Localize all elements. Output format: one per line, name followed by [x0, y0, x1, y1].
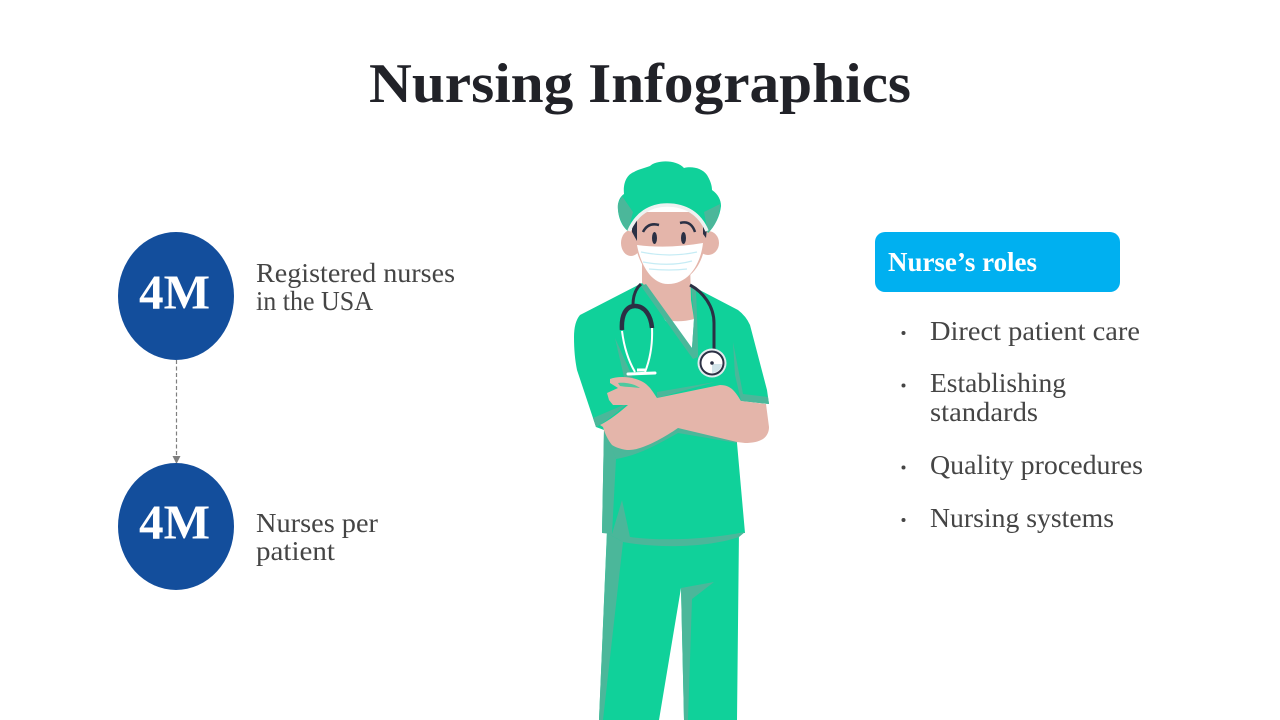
- role: quality procedures: Quality procedures: [930, 450, 1143, 480]
- text: registered nurses in the USA: Registered nurses: [256, 258, 455, 288]
- hair sides: [632, 217, 707, 241]
- illustration: nurse: [574, 161, 769, 720]
- pants: [599, 530, 739, 720]
- text: nurses per patient: [256, 508, 378, 566]
- role: establishing standards: Establishing: [930, 368, 1066, 398]
- arrow: dashed connector: [172, 360, 180, 464]
- role: nursing systems: Nursing systems: [930, 503, 1114, 533]
- title: Nursing Infographics: [369, 53, 911, 115]
- undershirt: [665, 319, 694, 348]
- eyes and brows: [643, 222, 695, 244]
- text: registered nurses in the USA: [256, 258, 455, 316]
- collar: [641, 284, 698, 359]
- role: direct patient care: Direct patient care: [930, 316, 1140, 346]
- text: nurses per patient: Nurses per: [256, 508, 378, 538]
- text: registered nurses in the USA: in the USA: [256, 286, 373, 316]
- role list: [902, 316, 1143, 533]
- panel: statistics: [118, 232, 455, 590]
- role heading box: Nurse’s roles: [888, 247, 1037, 277]
- shirt: [574, 283, 769, 546]
- face: [635, 212, 705, 283]
- role: establishing standards: [902, 368, 1066, 427]
- surgical cap: [618, 161, 721, 233]
- neck: [642, 262, 694, 322]
- role heading box: [875, 232, 1120, 292]
- stethoscope: [622, 284, 726, 378]
- stat circle: registered nurses: 4M: [139, 264, 210, 320]
- shirt shading: [604, 425, 737, 459]
- panel: nurse's roles: [875, 232, 1143, 533]
- stat circle: registered nurses: [118, 232, 234, 360]
- face mask: [637, 243, 703, 284]
- stat circle: nurses per patient: 4M: [139, 494, 210, 550]
- ears: [621, 230, 719, 256]
- stat circle: nurses per patient: [118, 463, 234, 590]
- role: establishing standards: standards: [930, 397, 1038, 427]
- crossed arms: [600, 377, 769, 450]
- text: nurses per patient: patient: [256, 536, 336, 566]
